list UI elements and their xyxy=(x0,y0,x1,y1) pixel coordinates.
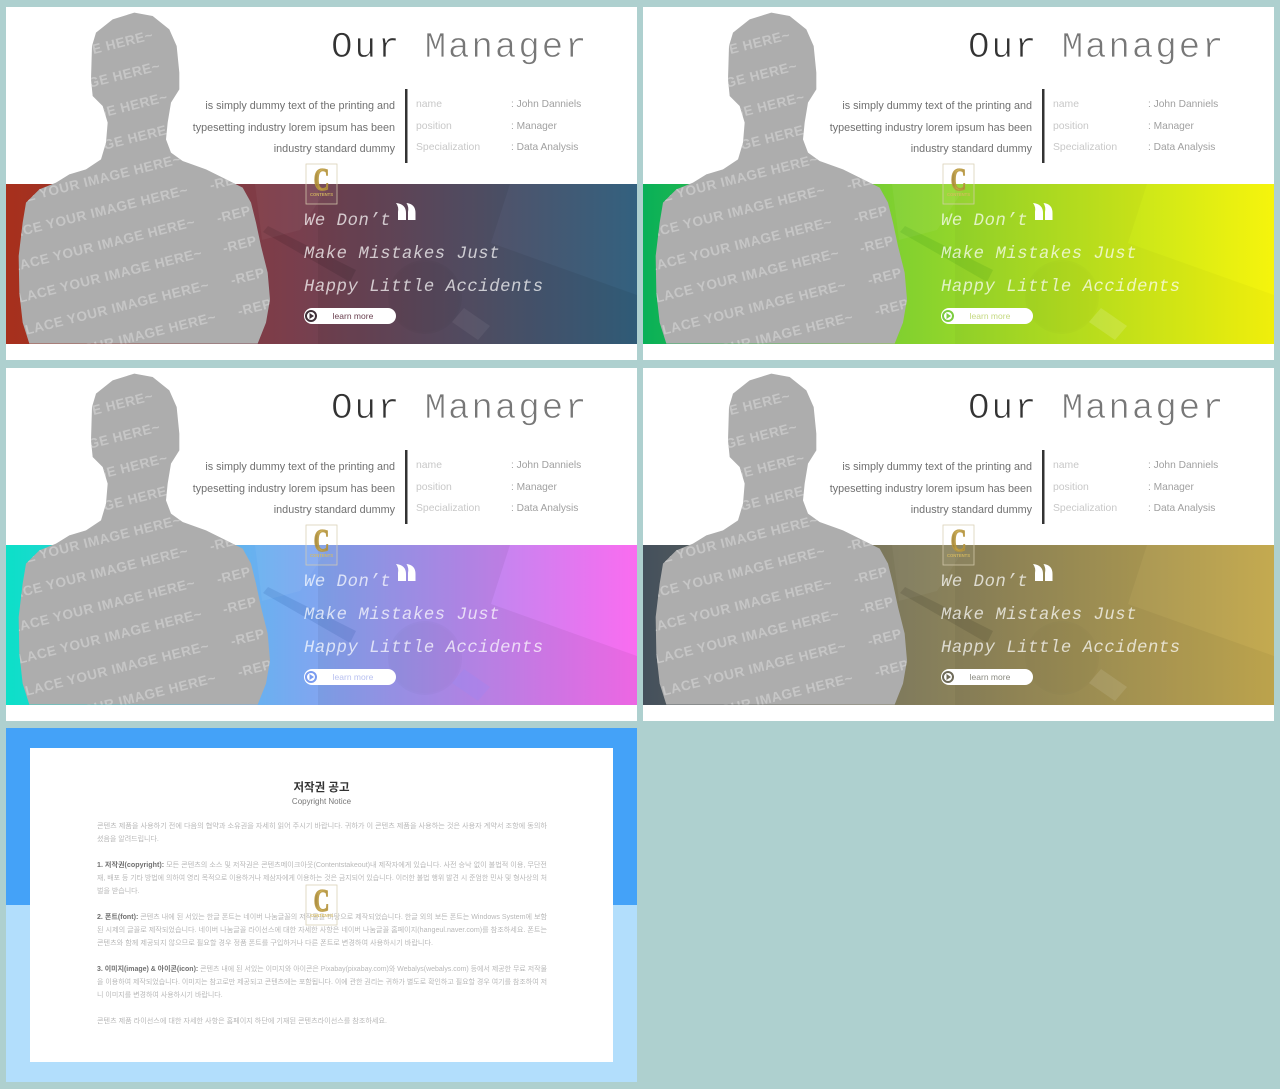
quote xyxy=(304,573,544,658)
profile details: position xyxy=(416,482,452,493)
profile details xyxy=(1053,460,1218,514)
profile details: : John Danniels xyxy=(1148,99,1218,110)
profile details: : John Danniels xyxy=(511,460,581,471)
notice body text: 콘텐츠와 함께 제공되지 않으므로 필요할 경우 정품 폰트를 구입하거나 다른 폰트로 변경하여 사용하시기 바랍니다. xyxy=(97,938,433,947)
silhouette placeholder: -REP xyxy=(215,564,252,587)
notice body text: 콘텐츠 제품을 사용하기 전에 다음의 협약과 소유권을 자세히 읽어 주시기 바랍니다. 귀하가 이 콘텐츠 제품을 사용하는 것은 사용자 계약서 조항에 동의하 xyxy=(97,821,548,830)
silhouette placeholder: -REP xyxy=(221,594,258,617)
profile details: Specialization xyxy=(1053,503,1117,514)
notice body text: 된 시제의 글꼴로 제작되었습니다. 네이버 나눔글꼴 라이선스에 대한 자세한 사항은 네이버 나눔글꼴 홈페이지(hangeul.naver.com)를 참조하세요. 폰트는 xyxy=(97,925,548,934)
notice body text: 벌을 받습니다. xyxy=(97,886,140,895)
profile details: : John Danniels xyxy=(1148,460,1218,471)
profile details: : Data Analysis xyxy=(1148,142,1215,153)
button: learn more: learn more xyxy=(970,672,1011,682)
notice body text: 을 이용하여 제작되었습니다. 이미지는 참고로만 제공되고 콘텐츠에는 포함됩니다. 이에 관한 권리는 귀하가 별도로 확인하고 필요할 경우 여기를 참조하여 저 xyxy=(97,977,547,986)
description text: is simply dummy text of the printing and xyxy=(842,100,1032,112)
silhouette placeholder: -REPLACE YOUR IMAGE HERE~ xyxy=(620,245,841,314)
silhouette placeholder: -REPLACE YOUR IMAGE HERE~ xyxy=(620,606,841,675)
notice body text: 2. 폰트(font): 콘텐츠 내에 된 서있는 한글 폰트는 네이버 나눔글꼴의 저작물을 바탕으로 제작되었습니다. 한글 외의 보든 폰트는 Windows System에 보함 xyxy=(97,912,548,921)
profile details: : Data Analysis xyxy=(511,503,578,514)
notice body text: 니 이미지를 변경하여 사용하시기 바랍니다. xyxy=(97,990,223,999)
logo: CONTENTS xyxy=(947,192,970,197)
silhouette placeholder: -REP xyxy=(229,626,266,649)
profile details: : John Danniels xyxy=(511,99,581,110)
silhouette placeholder xyxy=(656,374,907,705)
icon: quotation mark xyxy=(396,564,416,581)
profile details: : Manager xyxy=(511,121,557,132)
logo: C xyxy=(951,523,966,558)
profile details: Specialization xyxy=(416,503,480,514)
silhouette placeholder: -REP xyxy=(208,170,245,193)
silhouette placeholder: -REPLACE YOUR IMAGE HERE~ xyxy=(627,277,848,346)
logo: CONTENTS xyxy=(310,192,333,197)
silhouette placeholder: -REP xyxy=(208,531,245,554)
silhouette placeholder: -REPLACE YOUR IMAGE HERE~ xyxy=(585,450,806,519)
button: learn more xyxy=(304,669,396,685)
profile details: Specialization xyxy=(416,142,480,153)
profile details xyxy=(416,99,581,153)
slide background xyxy=(643,7,1274,360)
button: learn more xyxy=(941,308,1033,324)
silhouette placeholder: -REP xyxy=(873,657,910,680)
silhouette placeholder: -REPLACE YOUR IMAGE HERE~ xyxy=(606,182,827,251)
logo: CONTENTS xyxy=(310,553,333,558)
slide background xyxy=(6,7,637,360)
title: Our Manager xyxy=(968,27,1225,68)
silhouette placeholder: -REP xyxy=(866,626,903,649)
logo: C xyxy=(314,883,329,918)
silhouette placeholder: -REPLACE YOUR IMAGE HERE~ xyxy=(571,27,792,96)
silhouette placeholder: -REPLACE YOUR IMAGE HERE~ xyxy=(613,575,834,644)
light blue lower background xyxy=(6,905,637,1082)
silhouette placeholder: -REPLACE YOUR IMAGE HERE~ xyxy=(578,419,799,488)
panel: manager slide slate-gold xyxy=(643,368,1274,721)
icon: quotation mark xyxy=(1033,203,1052,220)
gradient photo band xyxy=(6,184,637,344)
button: learn more xyxy=(304,308,396,324)
quote xyxy=(304,212,544,297)
quote: Make Mistakes Just xyxy=(304,606,500,625)
profile details: position xyxy=(1053,482,1089,493)
slide background xyxy=(6,368,637,721)
icon: quotation mark xyxy=(396,203,416,220)
silhouette placeholder: -REP xyxy=(236,657,273,680)
profile details: : Manager xyxy=(1148,482,1194,493)
quote: We Don’t xyxy=(941,212,1028,231)
quote: Make Mistakes Just xyxy=(941,606,1137,625)
description text xyxy=(830,100,1033,155)
gradient photo band xyxy=(643,184,1274,344)
silhouette placeholder: -REP xyxy=(236,296,273,319)
description text: industry standard dummy xyxy=(274,504,396,516)
description text xyxy=(193,461,396,516)
divider bar xyxy=(1042,450,1044,524)
divider bar xyxy=(405,450,408,524)
quote: Happy Little Accidents xyxy=(941,639,1181,658)
logo xyxy=(306,883,337,925)
silhouette placeholder: -REP xyxy=(215,203,252,226)
notice body text: 재, 배포 등 기타 방법에 의하여 영리 목적으로 이용하거나 제삼자에게 이용하는 것은 금지되어 있습니다. 이러한 불법 행위 발견 시 준엄한 민사 및 형사상의 처 xyxy=(97,873,547,882)
gradient photo band xyxy=(643,545,1274,705)
profile details: : Data Analysis xyxy=(511,142,578,153)
description text: typesetting industry lorem ipsum has been xyxy=(830,483,1032,495)
profile details: name xyxy=(1053,99,1079,110)
profile details: position xyxy=(1053,121,1089,132)
silhouette placeholder: -REPLACE YOUR IMAGE HERE~ xyxy=(585,89,806,158)
button: learn more: learn more xyxy=(333,672,374,682)
silhouette placeholder: -REPLACE YOUR IMAGE HERE~ xyxy=(606,543,827,612)
silhouette placeholder: -REP xyxy=(229,265,266,288)
quote: Happy Little Accidents xyxy=(304,278,544,297)
profile details: : Manager xyxy=(511,482,557,493)
quote: Make Mistakes Just xyxy=(304,245,500,264)
profile details: name xyxy=(416,460,442,471)
silhouette placeholder: -REPLACE YOUR IMAGE HERE~ xyxy=(0,670,218,739)
panel: manager slide green-yellow xyxy=(643,7,1274,360)
notice body text: 3. 이미지(image) & 아이콘(icon): 콘텐츠 내에 된 서있는 이미지와 아이콘은 Pixabay(pixabay.com)와 Webalys(webalys.com) 등에서 제공한 무료 저작물 xyxy=(97,964,548,973)
notice body text: 콘텐츠 제품 라이선스에 대한 자세한 사항은 홈페이지 하단에 기재된 콘텐츠라이선스를 참조하세요. xyxy=(97,1016,387,1025)
logo xyxy=(943,162,974,204)
silhouette placeholder: -REPLACE YOUR IMAGE HERE~ xyxy=(0,309,218,378)
description text: industry standard dummy xyxy=(274,143,396,155)
silhouette placeholder: -REP xyxy=(845,531,882,554)
silhouette placeholder: -REP xyxy=(221,233,258,256)
profile details: : Manager xyxy=(1148,121,1194,132)
profile details xyxy=(416,460,581,514)
silhouette placeholder: -REPLACE YOUR IMAGE HERE~ xyxy=(578,58,799,127)
logo: CONTENTS xyxy=(947,553,970,558)
quote: Happy Little Accidents xyxy=(304,639,544,658)
silhouette placeholder: -REPLACE YOUR IMAGE HERE~ xyxy=(571,388,792,457)
silhouette placeholder xyxy=(18,374,270,705)
button: learn more: learn more xyxy=(970,311,1011,321)
silhouette placeholder: -REP xyxy=(845,170,882,193)
silhouette placeholder: -REPLACE YOUR IMAGE HERE~ xyxy=(593,120,814,189)
panel: copyright notice xyxy=(6,728,637,1082)
silhouette placeholder: -REP xyxy=(852,564,889,587)
logo xyxy=(943,523,974,565)
notice body text xyxy=(97,821,548,1025)
logo: CONTENTS xyxy=(310,913,333,918)
icon: quotation mark xyxy=(1033,564,1052,581)
silhouette placeholder xyxy=(18,12,270,344)
notice body text: 셨음을 알려드립니다. xyxy=(97,834,159,843)
silhouette placeholder xyxy=(656,12,907,344)
gradient photo band xyxy=(6,545,637,705)
blue upper background xyxy=(6,728,637,905)
quote: Make Mistakes Just xyxy=(941,245,1137,264)
description text xyxy=(193,100,396,155)
divider bar xyxy=(405,89,408,163)
description text: typesetting industry lorem ipsum has been xyxy=(830,122,1032,134)
quote: Happy Little Accidents xyxy=(941,278,1181,297)
silhouette placeholder: -REPLACE YOUR IMAGE HERE~ xyxy=(627,638,848,707)
panel: manager slide cyan-magenta xyxy=(0,368,637,739)
quote: We Don’t xyxy=(304,212,391,231)
profile details: name xyxy=(416,99,442,110)
white notice sheet xyxy=(30,748,613,1062)
silhouette placeholder: -REPLACE YOUR IMAGE HERE~ xyxy=(634,309,855,378)
silhouette placeholder: -REP xyxy=(858,594,895,617)
profile details: position xyxy=(416,121,452,132)
quote: We Don’t xyxy=(304,573,391,592)
logo xyxy=(306,523,337,565)
button: learn more: learn more xyxy=(333,311,374,321)
description text: industry standard dummy xyxy=(911,504,1033,516)
title: Our Manager xyxy=(968,388,1225,429)
notice subheading: Copyright Notice xyxy=(292,797,352,806)
silhouette placeholder: -REP xyxy=(873,296,910,319)
title: Our Manager xyxy=(331,27,588,68)
slide background xyxy=(643,368,1274,721)
profile details: name xyxy=(1053,460,1079,471)
profile details: Specialization xyxy=(1053,142,1117,153)
quote xyxy=(941,212,1181,297)
description text: industry standard dummy xyxy=(911,143,1033,155)
description text: typesetting industry lorem ipsum has been xyxy=(193,122,395,134)
logo xyxy=(306,162,337,204)
logo: C xyxy=(314,523,329,558)
description text: is simply dummy text of the printing and xyxy=(205,100,395,112)
silhouette placeholder: -REPLACE YOUR IMAGE HERE~ xyxy=(613,214,834,283)
silhouette placeholder: -REP xyxy=(852,203,889,226)
description text: is simply dummy text of the printing and xyxy=(842,461,1032,473)
notice heading: 저작권 공고 xyxy=(293,780,350,794)
panel: manager slide red-blue xyxy=(0,7,637,378)
quote: We Don’t xyxy=(941,573,1028,592)
description text: is simply dummy text of the printing and xyxy=(205,461,395,473)
logo: C xyxy=(951,162,966,197)
silhouette placeholder: -REPLACE YOUR IMAGE HERE~ xyxy=(593,481,814,550)
profile details: : Data Analysis xyxy=(1148,503,1215,514)
quote xyxy=(941,573,1181,658)
divider bar xyxy=(1042,89,1044,163)
button: learn more xyxy=(941,669,1033,685)
silhouette placeholder: -REP xyxy=(858,233,895,256)
silhouette placeholder: -REP xyxy=(866,265,903,288)
notice body text: 1. 저작권(copyright): 모든 콘텐츠의 소스 및 저작권은 콘텐츠메이크아웃(Contentstakeout)내 제작자에게 있습니다. 사전 승낙 없이 불법적 이용, 무단전 xyxy=(97,860,547,869)
silhouette placeholder: -REPLACE YOUR IMAGE HERE~ xyxy=(599,512,820,581)
silhouette placeholder: -REPLACE YOUR IMAGE HERE~ xyxy=(634,670,855,739)
silhouette placeholder: -REPLACE YOUR IMAGE HERE~ xyxy=(599,151,820,220)
description text xyxy=(830,461,1033,516)
profile details xyxy=(1053,99,1218,153)
description text: typesetting industry lorem ipsum has been xyxy=(193,483,395,495)
title: Our Manager xyxy=(331,388,588,429)
logo: C xyxy=(314,162,329,197)
